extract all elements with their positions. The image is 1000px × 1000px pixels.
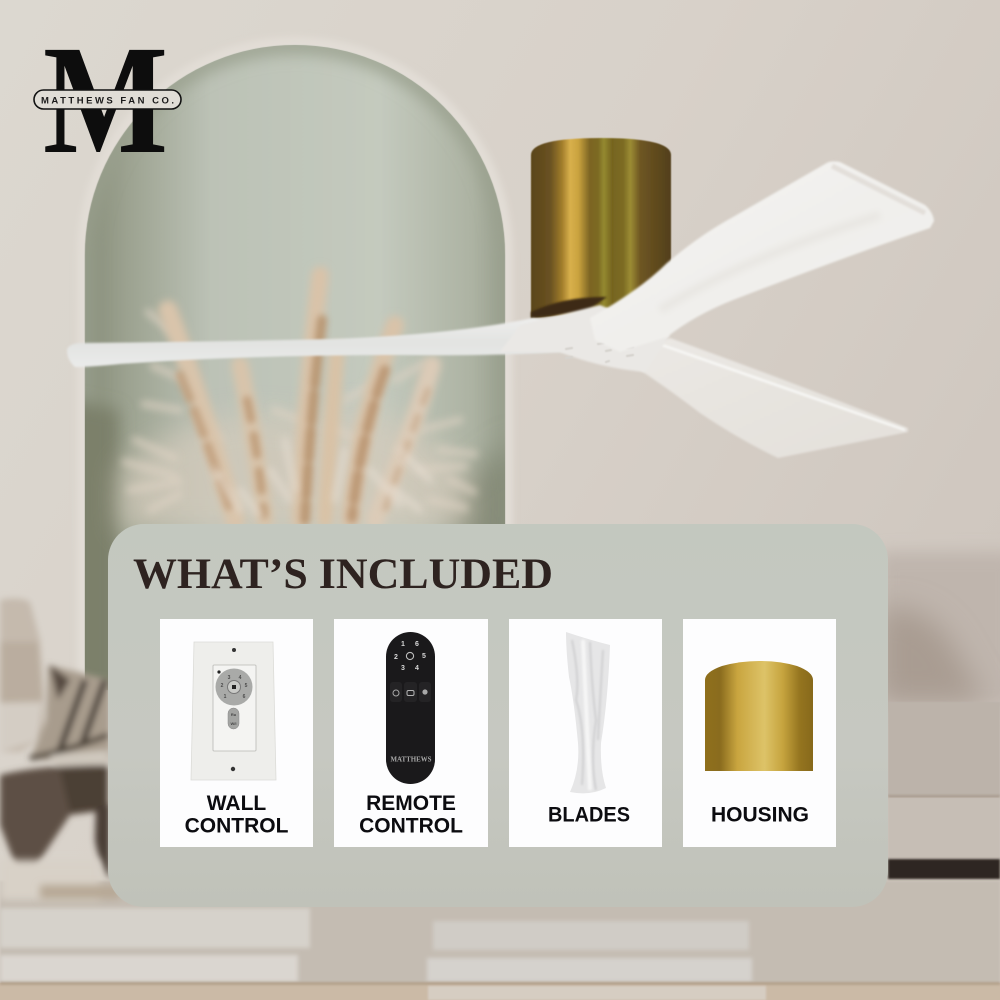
icon: wall control plate: 5 [245, 683, 248, 689]
logo: Matthews Fan Co.: M [43, 13, 168, 186]
floor with window reflections [0, 860, 1000, 1000]
label: HOUSING [711, 804, 809, 826]
upper right blade [590, 161, 934, 352]
icon: wall control plate: 6 [243, 694, 246, 700]
card: housing [683, 619, 836, 847]
icon: white wood blade [566, 632, 610, 793]
card: blades [509, 619, 662, 847]
card: wall control [160, 619, 313, 847]
fan housing [531, 138, 671, 318]
striped pillow and throw blanket [0, 665, 110, 890]
ceiling fan [67, 138, 934, 458]
arch niche [70, 37, 520, 695]
icon: wall control plate: W/l [230, 721, 236, 726]
label: REMOTE [366, 792, 456, 815]
icon: black remote: 1 [401, 641, 405, 648]
icon: brass housing [705, 661, 813, 771]
icon: black remote: 5 [422, 653, 426, 660]
icon: wall control plate: Ru [231, 712, 237, 717]
label: BLADES [548, 804, 630, 826]
panel: what's included [108, 524, 888, 907]
icon: wall control plate: 2 [221, 683, 224, 689]
icon: black remote: 3 [401, 665, 405, 672]
label [359, 792, 463, 838]
icon: black remote: 2 [394, 654, 398, 661]
icon: wall control plate [191, 642, 276, 780]
icon: black remote: 4 [415, 665, 419, 672]
label: CONTROL [359, 814, 463, 838]
label [185, 792, 289, 838]
icon: black remote: 6 [415, 641, 419, 648]
card: remote control [334, 619, 488, 847]
right sofa [880, 552, 1000, 879]
lower right blade [640, 338, 908, 458]
heading: WHAT’S INCLUDED [133, 551, 553, 598]
icon: wall control plate: 3 [228, 675, 231, 681]
icon: wall control plate: 1 [224, 694, 227, 700]
icon: wall control plate: 4 [239, 675, 242, 681]
icon: black remote: MATTHEWS [390, 756, 432, 764]
left armchair [0, 598, 46, 752]
pampas grass [120, 275, 475, 530]
icon: black remote [386, 632, 435, 784]
label: CONTROL [185, 814, 289, 838]
logo: Matthews Fan Co.: MATTHEWS FAN CO. [41, 96, 174, 106]
label: WALL [207, 792, 266, 815]
hub [500, 305, 670, 372]
left blade [67, 318, 600, 367]
